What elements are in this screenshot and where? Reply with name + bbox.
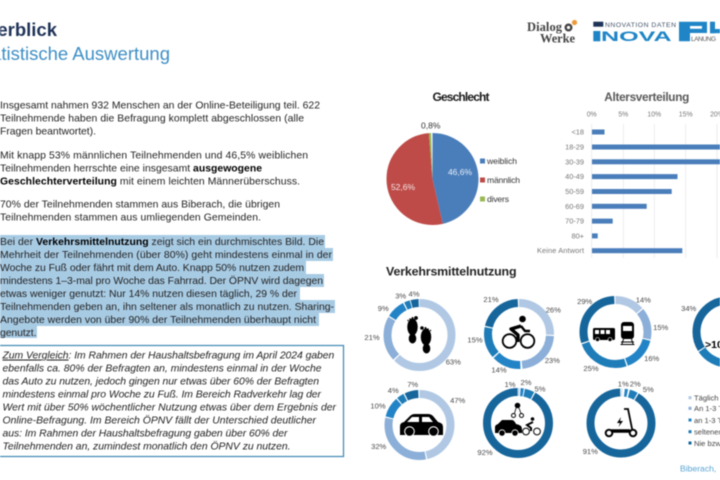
donut: Auto: 4% [388,386,399,395]
callout: comparison box: mindestens einmal pro Woche zu Fuß. Im Bereich Radverkehr lag der [2,390,322,400]
bar chart: Altersverteilung: 18-29 [565,142,584,152]
text block: highlighted mobility paragraph: genutzt. [0,328,36,339]
donut: ÖPNV: 29% [577,297,593,306]
donut: Auto: 32% [371,442,387,451]
bar chart: Altersverteilung: 5% [618,112,628,118]
donut: Sharing [477,378,549,457]
callout: comparison box [0,346,344,456]
donut: zu Fuß: 4% [409,290,420,298]
text block: highlighted mobility paragraph: etwas weniger genutzt: Nur 14% nutzen diesen täglich, 29 % der [0,289,298,300]
legend: Geschlecht: weiblich [486,156,517,166]
donut: ÖPNV: 15% [653,323,669,332]
text block: gender: Teilnehmenden herrschte eine insgesamt ausgewogene [0,164,262,174]
pie chart: Geschlecht [391,120,472,202]
donut: zu Fuß: 3% [395,292,406,300]
text block: origin [0,200,280,224]
pie chart: Geschlecht: 46,6% [448,167,472,177]
donut: Fahrrad: 23% [545,356,560,365]
donut: Fahrrad [467,295,561,374]
bar chart: Altersverteilung: 40-49 [565,172,584,181]
donut: Sharing: 2% [521,378,532,387]
donut: Auto [370,380,466,456]
text block: origin: Teilnehmenden stammen aus umliegenden Gemeinden. [0,212,261,224]
text block: highlighted mobility paragraph: Mehrheit der Teilnehmenden (über 80%) geht mindestens einmal in der [0,250,333,261]
icon: e-scooter [606,409,636,436]
heading: Altersverteilung: Altersverteilung [604,90,689,104]
donut: E-Scooter: 2% [630,380,641,388]
icon: footprints [407,316,431,354]
donut: Auto: 7% [407,380,418,389]
legend: Geschlecht: divers [487,194,509,204]
text block: highlighted mobility paragraph: Bei der Verkehrsmittelnutzung zeigt sich ein durchmischtes Bild. Die [0,237,324,248]
bar chart: Altersverteilung: <18 [571,128,584,136]
legend: Geschlecht [480,156,520,204]
logo: Dialog Werke: Dialog [527,20,563,34]
bar chart: Altersverteilung: 15% [679,112,693,118]
bar chart: Altersverteilung: 10% [647,112,661,118]
donut: Fahrrad: 15% [467,336,483,344]
callout: comparison box: aus: Im Rahmen der Haushaltsbefragung gaben über 60% der [2,428,288,440]
callout: comparison box: ebenfalls ca. 80% der Befragten an, mindestens einmal in der Woche [2,364,322,374]
donut: ÖPNV: 16% [644,354,660,363]
logo: Inova Plan: NOVA [601,29,672,45]
text block: gender: Mit knapp 53% männlichen Teilnehmenden und 46,5% weiblichen [0,150,308,162]
text block: highlighted mobility paragraph: Woche zu Fuß oder fährt mit dem Auto. Knapp 50% nutzen zudem [0,263,304,274]
text block: participation [0,100,320,138]
text block: highlighted mobility paragraph [0,235,335,339]
donut: E-Scooter: 1% [618,380,629,388]
bar chart: Altersverteilung: 0% [587,112,597,118]
text block: highlighted mobility paragraph: Teilnehmenden geben an, ihn seltener als monatlich zu nutzen. Sharing- [0,302,334,313]
logo: Inova Plan [593,22,720,45]
bar chart: Altersverteilung [537,112,720,258]
bar chart: Altersverteilung: 80+ [571,231,584,240]
donut: Fahrrad: 21% [483,295,499,304]
callout: comparison box: Wert mit über 50% wöchentlicher Nutzung etwas über dem Ergebnis der [2,402,337,414]
text block: gender [0,150,308,188]
footer: place: Biberach, [680,464,716,474]
callout: comparison box: Online-Befragung. Im Bereich ÖPNV fällt der Unterschied deutlicher [2,414,317,426]
text block: participation: Teilnehmende haben die Befragung komplett abgeschlossen (alle [0,114,304,124]
text block: gender: Geschlechterverteilung mit einem leichten Männerüberschuss. [0,176,300,188]
pie chart: Geschlecht: 52,6% [391,182,415,192]
logo: Inova Plan: NNOVATION DATEN [605,22,676,29]
icon: cyclist [503,316,534,348]
callout: comparison box: Teilnehmenden an, zumindest monatlich den ÖPNV zu nutzen. [2,440,290,452]
donut: zu Fuß: 63% [446,358,461,366]
callout: comparison box: das Auto zu nutzen, jedoch gingen nur etwas über 60% der Befragten [2,376,319,388]
icon: bus and train [593,322,634,344]
callout: comparison box: Zum Vergleich: Im Rahmen der Haushaltsbefragung im April 2024 gaben [2,350,335,362]
bar chart: Altersverteilung: Keine Antwort [537,246,584,255]
bar chart: Altersverteilung: 70-79 [565,217,584,226]
bar chart: Altersverteilung: 30-39 [565,157,584,166]
text block: participation: Fragen beantwortet). [0,126,96,138]
donut: ÖPNV: 25% [583,364,599,373]
pie chart: Geschlecht: 0,8% [421,120,441,130]
heading: Geschlecht: Geschlecht [432,90,490,104]
donut: E-Scooter [583,380,654,456]
donut: Sharing: 92% [477,448,493,457]
donut: E-Scooter: 91% [583,447,598,456]
donut: Sharing: 1% [505,380,516,389]
legend: Nutzungshäufigkeit: Täglich [694,394,718,402]
donut: zu Fuß: 21% [364,333,380,342]
bar chart: Altersverteilung: 50-59 [565,187,584,196]
donut: Auto: 10% [370,402,386,410]
legend: Geschlecht: männlich [487,175,520,185]
donut: Auto: 47% [450,396,466,405]
donut: E-Scooter: 5% [643,385,654,394]
donut: Sharing: 5% [535,384,546,394]
legend: Nutzungshäufigkeit [688,394,720,448]
donut: zu Fuß: 9% [378,304,389,313]
logo: Dialog Werke [527,20,577,46]
donut: distance, clipped at page edge: 34% [681,304,697,313]
donut: ÖPNV: 14% [636,296,651,304]
icon: sharing network, car and bike [495,403,540,436]
donut: ÖPNV [577,296,669,373]
text block: highlighted mobility paragraph: Angebote werden von über 90% der Teilnehmenden überhaupt nicht [0,315,316,326]
text block: origin: 70% der Teilnehmenden stammen aus Biberach, die übrigen [0,200,280,210]
logo: Inova Plan: LANUNG [691,36,716,43]
donut: Fahrrad: 26% [546,306,561,314]
heading: Verkehrsmittelnutzung: Verkehrsmittelnutzung [386,265,517,279]
logo: Dialog Werke: Werke [540,32,575,46]
donut: zu Fuß [364,290,461,367]
icon: car [400,414,443,436]
donut: Fahrrad: 14% [491,366,507,374]
donut: distance, clipped at page edge [681,300,720,364]
bar chart: Altersverteilung: 60-69 [565,202,584,211]
text block: highlighted mobility paragraph: mindestens 1–3-mal pro Woche das Fahrrad. Der ÖPNV wird dagegen [0,275,323,287]
text block: participation: Insgesamt nahmen 932 Menschen an der Online-Beteiligung teil. 622 [0,100,320,112]
